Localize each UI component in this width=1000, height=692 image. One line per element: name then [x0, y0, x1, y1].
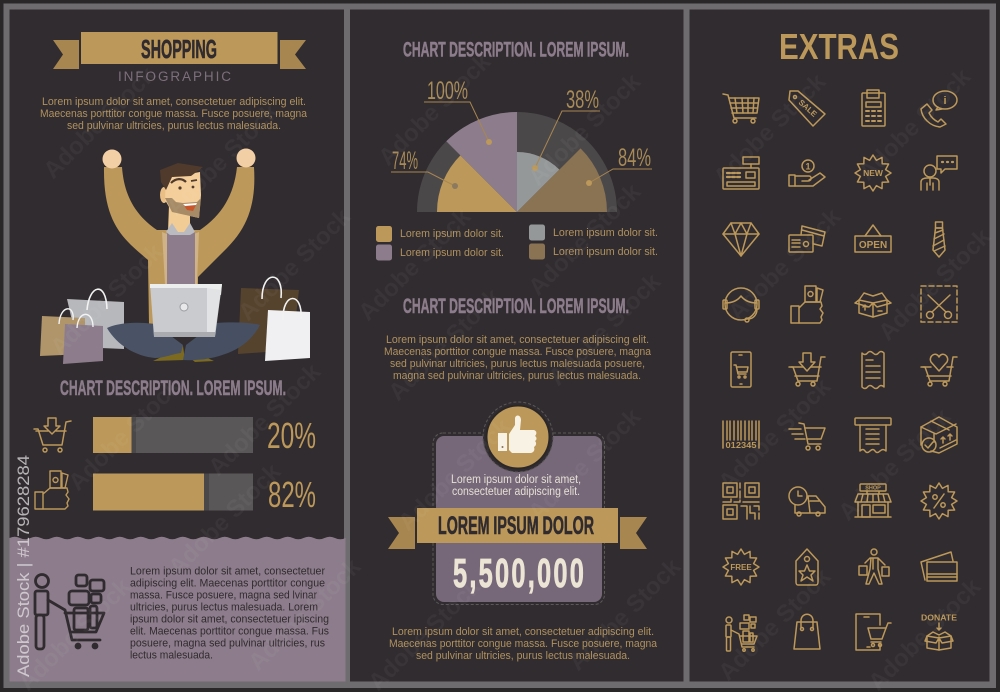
- bar 1: 20%: 20%: [267, 415, 316, 456]
- bag: gray: [67, 289, 124, 349]
- icon: sale tag: SALE: [797, 98, 819, 119]
- panel: shopping: [10, 32, 346, 682]
- stock image watermarks: Adobe Stock: [233, 203, 357, 326]
- title ribbon: SHOPPING: [141, 34, 217, 64]
- icon: tie: [933, 222, 945, 257]
- stock image watermarks: Adobe Stock: [833, 403, 957, 526]
- chart heading: CHART DESCRIPTION. LOREM IPSUM.: [403, 39, 629, 62]
- bar 1: 20%: [93, 415, 316, 456]
- body text: Maecenas porttitor congue massa. Fusce posuere, magna: [384, 346, 652, 358]
- icon: hand with coin: 1: [805, 162, 811, 172]
- collar: [166, 223, 195, 235]
- footer text: Lorem ipsum dolor sit amet, consectetuer adipiscing elit.: [392, 626, 654, 638]
- badge text: [451, 474, 581, 498]
- description text: [130, 566, 329, 662]
- panel: charts: [376, 39, 658, 662]
- icon: cart with arrow: [34, 418, 71, 452]
- icon: delivery truck with clock: [789, 487, 825, 516]
- chart heading: CHART DESCRIPTION. LOREM IPSUM.: [403, 295, 629, 318]
- icon: credit cards: [789, 226, 825, 252]
- legend: [376, 224, 658, 260]
- icon: box with check: [921, 417, 957, 453]
- stock image watermarks: Adobe Stock: [161, 98, 285, 221]
- icon: discount burst: [921, 483, 957, 519]
- footer text: [389, 626, 658, 662]
- stock image watermarks: Adobe Stock: [873, 223, 997, 346]
- icon: receipt printer: [855, 418, 891, 452]
- panel: extras: [723, 26, 957, 651]
- icon: person with speech bubble: [921, 156, 957, 190]
- bag: brown: [238, 277, 299, 354]
- icon: mobile shopping: [731, 352, 751, 387]
- icon: donate box: [921, 612, 957, 650]
- jacket: [104, 167, 254, 325]
- stock image watermarks: Adobe Stock: [63, 373, 187, 496]
- lapels: [162, 232, 168, 285]
- semicircle chart: [391, 77, 652, 212]
- icon: customer service headset: [723, 288, 759, 322]
- value labels: 84%: [618, 144, 651, 172]
- badge icon: thumbs up: [483, 402, 553, 472]
- icon: barcode: [723, 421, 759, 450]
- chart heading: CHART DESCRIPTION. LOREM IPSUM.: [60, 377, 286, 400]
- icon: QR code: [723, 483, 759, 519]
- icon: new burst: NEW: [863, 168, 884, 178]
- intro text: sed pulvinar ultricies, purus lectus malesuada.: [67, 120, 281, 132]
- legs: [107, 323, 183, 358]
- badge card: [388, 402, 647, 604]
- stock image watermarks: Adobe Stock: [203, 358, 327, 481]
- description text: posuere, magna sed pulvinar ultricies, rus: [130, 638, 325, 650]
- description text: ipsum dolor sit amet, consectetuer ipiscing: [130, 614, 329, 626]
- stock image watermarks: Adobe Stock: [383, 283, 507, 406]
- shoes: [153, 346, 185, 361]
- bag: tan: [40, 309, 85, 356]
- icon: cart with heart: [921, 354, 957, 386]
- stock image watermarks: Adobe Stock: [543, 268, 667, 391]
- badge text: Lorem ipsum dolor sit amet,: [451, 474, 581, 486]
- vertical stock image id: Adobe Stock | #179628284: [14, 455, 33, 677]
- subtitle: INFOGRAPHIC: [118, 69, 231, 84]
- icon: shop storefront: [855, 484, 891, 517]
- bar 2: 82%: [93, 474, 316, 515]
- stock image watermarks: Adobe Stock: [713, 563, 837, 686]
- icon: coupon scissors: [921, 286, 957, 322]
- footer text: Maecenas porttitor congue massa. Fusce posuere, magna: [389, 638, 658, 650]
- icon: shopper with full cart: [35, 574, 104, 649]
- value labels: 38%: [566, 86, 599, 114]
- icon: diamond: [723, 223, 759, 256]
- icon: hand with money: [35, 471, 69, 509]
- icon: receipt: [862, 352, 884, 388]
- stock image watermarks: Adobe Stock: [723, 203, 847, 326]
- legend: Lorem ipsum dolor sit.: [400, 228, 504, 240]
- icon: new burst: [855, 155, 891, 191]
- body text: [384, 334, 652, 382]
- icon: hand with coin: [789, 160, 825, 186]
- body text: magna sed pulvinar ultricies, purus lectus malesuada.: [393, 370, 641, 382]
- intro text: Maecenas porttitor congue massa. Fusce posuere, magna: [40, 108, 308, 120]
- body text: sed pulvinar ultricies, purus lectus malesuada posuere,: [390, 358, 645, 370]
- head: [160, 163, 203, 218]
- legend: Lorem ipsum dolor sit.: [553, 246, 658, 258]
- description text: Lorem ipsum dolor sit amet, consectetuer: [130, 566, 325, 578]
- stock image watermarks: Adobe Stock: [563, 553, 687, 676]
- description text: elit. Maecenas porttitor congue massa. Fus: [130, 626, 329, 638]
- heading: EXTRAS: [779, 26, 899, 67]
- icon: stacked cards: [921, 552, 957, 581]
- title ribbon: [53, 32, 306, 69]
- bag: purple: [63, 314, 103, 364]
- stock image watermarks: Adobe Stock: [523, 178, 647, 301]
- icon: donate box: DONATE: [921, 612, 957, 622]
- stock image watermarks: Adobe Stock: [523, 403, 647, 526]
- icon: shopper walking with bags: [859, 549, 889, 584]
- description text: massa. Fusce posuere, magna sed lvinar: [130, 590, 317, 602]
- sweater: [167, 232, 195, 286]
- bag: white: [265, 298, 310, 361]
- leader lines: [391, 102, 652, 186]
- stock image watermarks: Adobe Stock: [373, 48, 497, 171]
- footer text: sed pulvinar ultricies, purus lectus malesuada.: [416, 650, 630, 662]
- icon: free burst: FREE: [730, 563, 752, 572]
- ribbon: [388, 508, 647, 549]
- icon: smartphone with cart: [856, 614, 891, 650]
- stock image watermarks: Adobe Stock: [713, 373, 837, 496]
- fists: [102, 150, 122, 168]
- legend: Lorem ipsum dolor sit.: [400, 247, 504, 259]
- stock image watermarks: Adobe Stock: [353, 203, 477, 326]
- description text: lectus malesuada.: [130, 650, 213, 662]
- neck: [168, 205, 190, 232]
- icon: shop storefront: SHOP: [865, 486, 881, 492]
- stock image watermarks: Adobe Stock: [45, 238, 169, 361]
- laptop: [150, 284, 222, 337]
- stock image watermarks: Adobe Stock: [853, 63, 977, 186]
- icon: shopping cart: [723, 94, 759, 123]
- description text: ultricies, purus lectus malesuada. Lorem: [130, 602, 318, 614]
- description text: adipiscing elit. Maecenas porttitor congue: [130, 578, 325, 590]
- ribbon: LOREM IPSUM DOLOR: [438, 512, 594, 540]
- value labels: 100%: [427, 77, 468, 105]
- legend: Lorem ipsum dolor sit.: [553, 227, 658, 239]
- icon: phone with info bubble: [921, 91, 957, 127]
- icon: sale tag: [789, 91, 825, 126]
- big number: 5,500,000: [453, 551, 586, 597]
- icon: fast cart: [789, 423, 825, 450]
- icon: phone with info bubble: i: [943, 95, 947, 107]
- icon: open sign: [855, 225, 891, 252]
- value labels: [392, 77, 651, 175]
- intro text: Lorem ipsum dolor sit amet, consectetuer adipiscing elit.: [42, 96, 306, 108]
- stock image watermarks: Adobe Stock: [393, 413, 517, 536]
- icon: star tag: [796, 549, 818, 585]
- icon: cart with down arrow: [789, 353, 825, 386]
- badge text: consectetuer adipiscing elit.: [452, 486, 580, 498]
- stock image watermarks: Adobe Stock: [523, 68, 647, 191]
- stock image watermarks: Adobe Stock: [243, 553, 367, 676]
- intro text: [40, 96, 308, 132]
- purple wavy band: [10, 537, 346, 682]
- value labels: 74%: [392, 147, 418, 175]
- icon: barcode: 012345: [725, 440, 757, 450]
- bar 2: 82%: 82%: [268, 474, 316, 515]
- icon: free burst: [723, 549, 759, 585]
- body text: Lorem ipsum dolor sit amet, consectetuer adipiscing elit.: [386, 334, 649, 346]
- illustration: man with laptop and shopping bags: [40, 148, 310, 364]
- stock image watermarks: Adobe Stock: [163, 458, 287, 581]
- icon: card terminal: [862, 90, 885, 126]
- icon: shopping bag: [794, 614, 820, 649]
- stock image watermarks: Adobe Stock: [708, 68, 832, 191]
- icon: person with full cart: [726, 615, 757, 651]
- icon: open sign: OPEN: [859, 240, 887, 251]
- icon: open box: [855, 293, 891, 317]
- stock image watermarks: Adobe Stock: [38, 61, 162, 184]
- icon: cash register: [723, 157, 759, 189]
- leader dots: [452, 139, 592, 189]
- icon: hand with money: [791, 286, 823, 323]
